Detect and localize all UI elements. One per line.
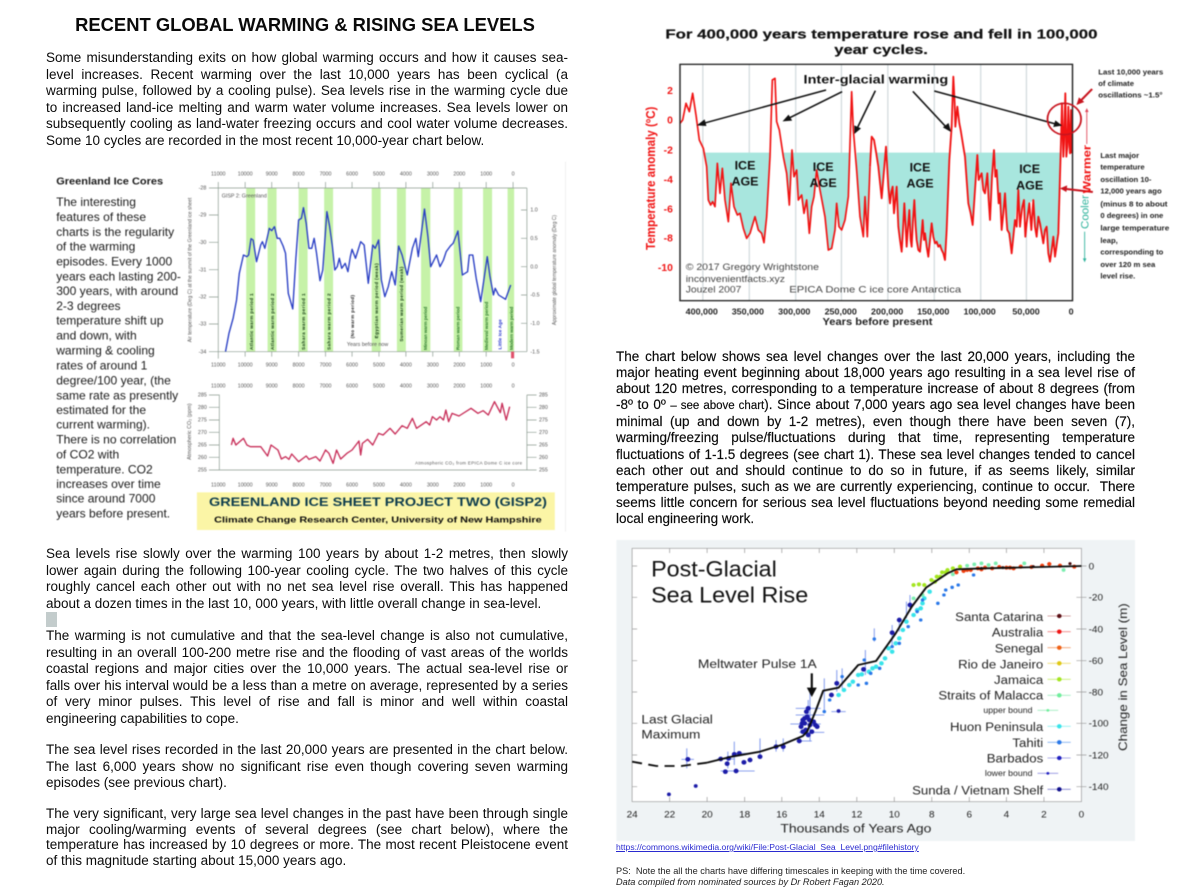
y-axis title: Change in Sea Level (m) [1117,603,1130,751]
x-axis values: 2 [1041,810,1047,821]
GISP2 banner: Climate Change Research Center, University of New Hampshire [214,515,542,525]
note: last major oscillation: temperature [1100,163,1145,172]
x-axis values: 8 [929,810,935,821]
legend: Jamaica [994,672,1044,687]
text block: sea levels rise slowly: lower again during the following 100-year cooling cycle. The two halves of this cycle [46,563,568,578]
CO2 chart axis labels: 1000 [480,383,492,389]
x-axis title: Thousands of Years Ago [780,822,932,836]
text block: warming is not cumulative [46,628,568,726]
note: last 10,000 years: of climate [1098,79,1134,88]
x-axis values: 20 [702,810,713,821]
text block: chart below shows sea level changes: major heating event beginning about 18,000 years ago resulting in a sea level rise of [616,365,1135,380]
temperature chart axis labels: Years before now [347,342,388,348]
warm period labels: Atlantic warm period 2 [270,293,276,350]
CO2 chart axis labels: 270 [198,430,207,436]
dashed extrapolation [632,762,707,766]
note: last major oscillation: over 120 m sea [1100,260,1156,269]
y-axis values: -60 [1089,656,1103,667]
legend: Sunda / Vietnam Shelf [912,783,1044,797]
warmer / cooler scale: Cooler [1079,195,1092,229]
text block: introduction: level increases. Recent warming over the last 10,000 years has been cyclical (a [46,67,568,82]
ice age labels [731,159,1043,192]
text block: chart below shows sea level changes: fluctuations of 1-1.5 degrees (see chart 1). These sea level changes tended to cancel [616,447,1135,462]
text block: Greenland Ice Cores commentary: There is no correlation [56,433,176,446]
warmer / cooler scale: Warmer [1081,145,1094,193]
y-axis title: Temperature anomaly (ºC) [644,107,658,250]
text block: Greenland Ice Cores commentary: same rate as presently [56,389,178,402]
CO2 chart axis labels: 5000 [373,483,385,489]
text block: chart below shows sea level changes: local engineering work. [616,511,754,526]
y-axis values [658,86,673,274]
text block: very large sea level changes: The very significant, very large sea level changes in the past have been through single [46,806,568,821]
legend: Australia [992,625,1044,640]
arrow: to last major oscillation [1060,185,1093,192]
text block: Greenland Ice Cores commentary [55,176,181,521]
CO2 chart axes [209,395,537,470]
warmer / cooler scale [1079,108,1094,262]
CO2 chart axis labels: 3000 [427,483,439,489]
x-axis values: 14 [814,810,825,821]
warm period labels: Egyptian warm period (weak) [374,263,380,338]
text block: very large sea level changes [46,806,568,868]
text block: introduction: warming pulse, followed by a cooling pulse). Sea levels rise in the warming cycle due [46,83,568,98]
temperature chart axis labels: 11000 [211,363,226,369]
temperature chart axis labels: Approximate global temperature anomaly (Deg C) [552,215,558,325]
temperature chart axis labels: 6000 [346,172,358,178]
text block: introduction: subsequently cooling as land-water freezing occurs and cool water volume decreases. [46,116,568,131]
CO2 chart axis labels: 275 [539,418,548,424]
text block: Greenland Ice Cores commentary: 300 years, with around [56,284,178,298]
note: last major oscillation: 0 degrees) in one [1100,211,1163,220]
warm period labels: Medieval warm period [484,302,490,350]
CO2 chart axis labels: 9000 [266,483,278,489]
temperature chart axis labels: 10000 [238,363,253,369]
x-axis values: 50,000 [1012,307,1040,317]
CO2 chart axis labels: 270 [539,430,548,436]
credits [686,262,962,295]
x-axis values: 200,000 [871,307,903,317]
text block: chart below shows sea level changes: minimal (up and down by 1-2 metres), even though there have been seven (7), [616,414,1135,429]
text block: sea levels rise slowly: Sea levels rise slowly over the warming 100 years by about 1-2 metres, then slowly [46,546,568,561]
legend: Rio de Janeiro [958,657,1043,671]
legend: Senegal [995,641,1043,656]
CO2 chart axis labels: 285 [198,393,207,399]
temperature chart axis labels [188,172,558,369]
red circle around last 10,000 years [1048,103,1081,135]
CO2 chart axis labels: 260 [539,455,548,461]
text block: Greenland Ice Cores commentary: temperature shift up [56,314,164,328]
text block: Greenland Ice Cores commentary: degree/100 year, (the [56,374,171,387]
text block: chart below shows sea level changes [616,349,1136,526]
chart background [616,540,1135,841]
ice age labels: ICE [1019,162,1040,176]
text block: introduction: to increased land-ice melting and warm water volume increases. Sea levels lower on [46,100,568,115]
ice age labels: AGE [1016,179,1043,192]
x-axis values: 24 [627,810,638,821]
note: last major oscillation: Last major [1100,151,1139,160]
CO2 chart axis labels: 5000 [373,383,385,389]
text block: Greenland Ice Cores commentary: rates of around 1 [56,359,148,372]
temperature chart axis labels: 8000 [293,363,305,369]
title: RECENT GLOBAL WARMING & RISING SEA LEVELS [75,14,535,35]
x-axis values: 10 [889,810,900,821]
text block: Greenland Ice Cores commentary: years before present. [56,507,170,521]
x-axis values: 350,000 [732,307,764,317]
note: last major oscillation: level rise. [1100,272,1135,281]
temperature chart axis labels: -31 [199,267,206,273]
CO2 chart axis labels: 4000 [400,483,412,489]
text block: warming is not cumulative: falls over his interval would be a less than a metre on average, represented by a series [46,678,568,692]
text block: 20,000 year sea level rises: The last 6,000 years show no significant rise even though covering seven warming [46,758,568,774]
warm period labels: Sumerian warm period (weak) [399,266,405,342]
chart title [651,556,808,607]
CO2 chart axis labels: 2000 [453,483,465,489]
x-axis title: Years before present [822,317,933,328]
data error bars [681,595,910,771]
CO2 chart axis labels: 4000 [400,383,412,389]
text block: very large sea level changes: of this magnitude starting about 15,000 years ago. [46,853,346,868]
y-axis values [1089,562,1109,793]
text block: warming is not cumulative: engineering capabilities to cope. [46,710,239,726]
CO2 chart axis labels: 280 [198,405,207,411]
sea level curve [707,566,1081,763]
temperature line [226,208,511,352]
temperature chart axis labels: -0.5 [530,293,540,299]
chart title: Post-Glacial [651,556,777,581]
warm period labels: Sahara warm period 2 [326,293,332,350]
warm period bands [246,188,514,352]
CO2 chart axis labels: 0 [512,483,515,489]
CO2 chart axis labels: 10000 [238,483,253,489]
highlighted empty line marker [46,612,57,627]
x-axis values: 300,000 [778,307,811,317]
annotation: meltwater pulse 1A: Meltwater Pulse 1A [698,657,818,671]
annotation: last glacial maximum: Last Glacial [641,713,713,727]
temperature chart axis labels: 9000 [266,172,278,178]
ice age labels: AGE [810,176,837,190]
text block: Greenland Ice Cores commentary: charts is the regularity [56,225,174,239]
arrow: meltwater pulse [807,673,817,697]
y-axis values: -120 [1089,751,1109,761]
ice age shaded regions, right half [870,153,1061,262]
chart heading: For 400,000 years temperature rose and fell in 100,000 [665,27,1098,41]
data points: cyan, green and red proxies [669,563,1074,794]
text block: sea levels rise slowly: about a dozen times in the last 10, 000 years, with little overall change in sea-level. [46,596,541,611]
temperature chart axes [209,182,527,359]
text block: Greenland Ice Cores commentary: features of these [56,210,146,224]
legend: upper bound [983,705,1033,715]
source link: https://commons.wikimedia.org/wiki/File:Post-Glacial_Sea_Level.png#filehistory [616,842,919,852]
CO2 chart axis labels: 275 [198,418,207,424]
x-axis values: 18 [739,810,750,821]
CO2 chart axis labels: 8000 [293,483,305,489]
legend: Huon Peninsula [950,719,1044,734]
text block: chart below shows sea level changes: each other out and should continue to do so in future, if as seems likely, similar [616,463,1135,478]
note: last major oscillation: leap, [1100,236,1118,245]
x-axis values: 4 [1004,810,1010,821]
legend [912,609,1071,797]
panel: Greenland ice cores chart [55,162,566,531]
legend: Tahiti [1012,735,1043,750]
x-axis values [686,307,1074,317]
CO2 chart axis labels [187,383,548,489]
CO2 chart axis labels: 6000 [346,483,358,489]
temperature chart axis labels: 0.0 [530,264,538,270]
CO2 chart axis labels: 265 [539,443,548,449]
temperature chart axis labels: 9000 [266,363,278,369]
axis ticks [632,548,1086,802]
y-axis values: -40 [1089,625,1103,635]
temperature chart axis labels: 3000 [427,172,439,178]
x-axis values: 150,000 [917,307,950,317]
legend: Straits of Malacca [938,688,1044,703]
text block: warming is not cumulative: coastal regions and major cities over the 10,000 years. The actual sea-level rise or [46,661,568,676]
note: last 10,000 years: Last 10,000 years [1098,68,1163,76]
x-axis values: 100,000 [964,307,996,317]
temperature chart axis labels: 2000 [453,172,465,178]
footnote: PS: Note the all the charts have differing timescales in keeping with the time covered. [616,866,965,876]
text block: introduction: Some 10 cycles are recorded in the most recent 10,000-year chart below. [46,133,484,148]
temperature chart axis labels: 0 [512,172,515,178]
text block: chart below shows sea level changes: warming/freezing pulse/fluctuations during that time, representing temperature [616,430,1135,445]
text block: Greenland Ice Cores commentary: since around 7000 [56,492,156,506]
temperature chart axis labels: 0.5 [530,236,538,242]
temperature chart axis labels: 5000 [373,363,385,369]
CO2 chart axis labels: 3000 [427,383,439,389]
ice age labels: ICE [910,161,930,175]
temperature curve, recent half [870,77,1072,262]
text block: Greenland Ice Cores commentary: years each lasting 200- [56,270,181,283]
CO2 chart axis labels: 10000 [238,383,253,389]
text block: Greenland Ice Cores commentary: increases over time [56,477,161,491]
y-axis values: -100 [1089,719,1109,730]
temperature chart axis labels: -32 [199,295,206,301]
text block: Greenland Ice Cores commentary: The interesting [56,195,136,209]
panel: 400,000 year temperature chart [644,27,1170,328]
credits: EPICA Dome C ice core Antarctica [789,285,962,295]
temperature chart axis labels: -34 [199,349,206,355]
CO2 chart axis labels: 11000 [211,483,226,489]
ice age labels: ICE [735,159,755,173]
text block: Greenland Ice Cores commentary: warming & cooling [55,344,155,358]
text block: introduction [46,50,568,148]
x-axis values: 16 [776,810,787,821]
CO2 chart axis labels: 7000 [320,383,332,389]
y-axis values: -80 [1089,688,1103,698]
y-axis values: -8 [664,234,673,245]
temperature chart axis labels: 10000 [238,172,253,178]
GISP2 banner [197,492,555,530]
CO2 chart axis labels: 7000 [320,483,332,489]
y-axis values: -10 [658,263,673,274]
legend: Barbados [987,751,1043,766]
x-axis values: 0 [1079,810,1084,821]
text block: chart below shows sea level changes: temperature pulses, such as we are currently experiencing, continue to occur. There [616,479,1135,494]
temperature chart axis labels: GISP 2: Greenland [222,193,267,199]
text block: warming is not cumulative: of very minor pulses. This level of rise and fall is minor and well within coastal [46,694,568,709]
ice age labels: ICE [813,160,834,174]
text block: introduction: Some misunderstanding exits on how global warming occurs and how it causes sea- [46,50,568,65]
temperature chart axis labels: 1.0 [530,208,538,214]
ice age labels: AGE [906,177,934,191]
CO2 chart axis labels: 8000 [293,383,305,389]
CO2 line [231,402,510,463]
temperature chart axis labels: 3000 [427,363,439,369]
warm period labels: Modern warm period [509,307,515,350]
CO2 chart axis labels: 11000 [211,383,226,389]
text block: sea levels rise slowly: roughly cancel each other out with no net sea level rise overall. This has happened [46,579,568,594]
text block: Greenland Ice Cores commentary: episodes. Every 1000 [56,255,173,268]
y-axis values: -4 [664,175,673,186]
text block: chart below shows sea level changes: about 120 metres, corresponding to a temperature increase of about 8 degrees (from [616,381,1135,396]
temperature chart axis labels: Air temperature (Deg C) at the summit of the Greenland ice sheet [188,197,194,342]
credits: inconvenientfacts.xyz [686,274,785,285]
temperature chart axis labels: 0 [512,363,515,369]
x-axis values: 12 [851,810,862,821]
CO2 chart axis labels: 6000 [346,383,358,389]
note: last major oscillation: oscillation 10- [1100,175,1152,184]
warm period labels: Sahara warm period 1 [301,293,307,350]
temperature chart axis labels: 7000 [320,172,332,178]
x-axis values: 0 [1069,307,1074,317]
text block: Greenland Ice Cores commentary: temperature. CO2 [56,463,153,476]
frame [680,64,1072,301]
warm period labels: Roman warm period [455,307,461,350]
text block: very large sea level changes: major cooling/warming events of several degrees (see chart below), where the [46,822,568,837]
CO2 chart axis labels: 1000 [480,483,492,489]
annotation: last glacial maximum [641,713,713,741]
CO2 chart axis labels: 255 [539,468,548,474]
ice age shaded regions [705,153,870,250]
arrow: to circle [1076,89,1092,105]
note: last major oscillation: 12,000 years ago [1100,187,1162,196]
footnote: Data compiled from nominated sources by Dr Robert Fagan 2020. [616,877,885,887]
text block: very large sea level changes: temperature has increased by 10 degrees or more. The most recent Pleistocene event [46,837,568,852]
panel: post-glacial sea level rise chart [616,540,1135,841]
x-axis values: 400,000 [686,307,718,317]
text block: chart below shows sea level changes: -8º to 0º – see above chart). Since about 7,000 years ago sea level changes have been [616,397,1135,412]
text block: Greenland Ice Cores commentary: of CO2 with [56,448,119,461]
temperature chart axis labels: -1.5 [530,349,540,355]
CO2 chart axis labels: 285 [539,393,548,399]
arrows: inter-glacial pointers [697,90,1062,134]
note: last 10,000 years [1098,68,1163,99]
text block: Greenland Ice Cores commentary: and down, with [56,329,137,343]
text block: 20,000 year sea level rises: episodes (see previous chart). [46,775,227,790]
text block: Greenland Ice Cores commentary: Greenland Ice Cores [56,176,163,188]
CO2 chart axis labels: 0 [512,383,515,389]
note: last major oscillation: corresponding to [1100,248,1164,257]
CO2 chart axis labels: 255 [198,468,207,474]
temperature chart axis labels: 11000 [211,172,226,178]
plot area [632,548,1081,802]
text block: chart below shows sea level changes: seems little concern for serious sea level fluctuations beyond needing some remedial [616,495,1135,510]
warm period labels: Minoan warm period [423,307,429,350]
warm period labels: Little Ice Age [497,319,503,349]
GISP2 banner: GREENLAND ICE SHEET PROJECT TWO (GISP2) [209,495,547,509]
text block: warming is not cumulative: The warming is not cumulative and that the sea-level change is also not cumulative, [46,628,568,643]
temperature chart axis labels: -1.0 [530,321,540,327]
warm period labels: (No warm period) [350,295,356,338]
y-axis values: -2 [664,146,673,157]
text block: sea levels rise slowly [46,546,568,611]
vertical grid [703,65,1026,300]
modern marker [511,352,514,358]
footnote [616,866,965,887]
temperature chart axis labels: 7000 [320,363,332,369]
temperature chart axis labels: -29 [199,213,206,219]
warm period labels: Atlantic warm period 1 [249,293,255,350]
x-axis values: 6 [967,810,972,821]
temperature chart axis labels: -28 [199,186,206,192]
note: last major oscillation [1100,151,1169,281]
text block: Greenland Ice Cores commentary: current warming). [56,418,150,432]
chart heading [665,27,1098,57]
temperature chart axis labels: 1000 [480,363,492,369]
temperature curve, older half [680,78,870,250]
temperature chart axis labels: 4000 [400,363,412,369]
temperature chart axis labels: -33 [199,322,206,328]
CO2 chart axis labels: Atmospheric CO₂ from EPICA Dome C ice core [415,461,523,466]
y-axis values: -6 [664,205,673,215]
annotation: last glacial maximum: Maximum [641,728,700,741]
legend: lower bound [985,768,1033,778]
credits: Jouzel 2007 [686,285,741,295]
CO2 chart axis labels: 9000 [266,383,278,389]
temperature chart axis labels: 4000 [400,172,412,178]
note: last major oscillation: (minus 8 to about [1100,200,1168,208]
note: last major oscillation: large temperature [1100,224,1169,233]
y-axis values: 0 [1089,562,1094,572]
temperature chart axis labels: 2000 [453,363,465,369]
CO2 chart axis labels: 280 [539,405,548,411]
CO2 chart axis labels: 2000 [453,383,465,389]
y-axis values: 2 [667,86,673,97]
chart heading: year cycles. [834,42,928,57]
legend: Santa Catarina [955,609,1044,624]
text block: Greenland Ice Cores commentary: of the warming [56,240,135,254]
note: last 10,000 years: oscillations ~1.5° [1098,91,1163,99]
y-axis values: -140 [1089,782,1109,793]
y-axis values: -20 [1089,593,1103,604]
text block: Greenland Ice Cores commentary: estimated for the [56,403,146,417]
CO2 chart axis labels: 265 [198,443,207,449]
text block: 20,000 year sea level rises [46,742,568,790]
CO2 chart axis labels: Atmospheric CO₂ (ppm) [187,403,193,460]
temperature chart axis labels: 6000 [346,363,358,369]
CO2 chart axis labels: 260 [198,455,207,461]
x-axis values: 250,000 [825,307,857,317]
y-axis values: 0 [667,116,673,126]
text block: chart below shows sea level changes: The chart below shows sea level changes over the last 20,000 years, including the [616,349,1135,364]
ice age labels: AGE [731,175,759,189]
text block: Greenland Ice Cores commentary: 2-3 degrees [56,299,121,313]
temperature chart axis labels: 5000 [373,172,385,178]
credits: © 2017 Gregory Wrightstone [686,262,819,273]
x-axis values: 22 [664,810,675,821]
x-axis values [627,810,1084,821]
text block: warming is not cumulative: resulting in an overall 100-200 metre rise and the flooding of vast areas of the worlds [46,644,568,660]
temperature chart axis labels: 8000 [293,172,305,178]
warm period labels [249,263,515,350]
text block: 20,000 year sea level rises: The sea level rises recorded in the last 20,000 years are presented in the chart below. [46,742,568,757]
chart title: Sea Level Rise [651,582,808,607]
temperature chart axis labels: -30 [199,240,206,246]
temperature chart axis labels: 1000 [480,172,492,178]
heading: inter-glacial warming: Inter-glacial warming [804,72,948,86]
